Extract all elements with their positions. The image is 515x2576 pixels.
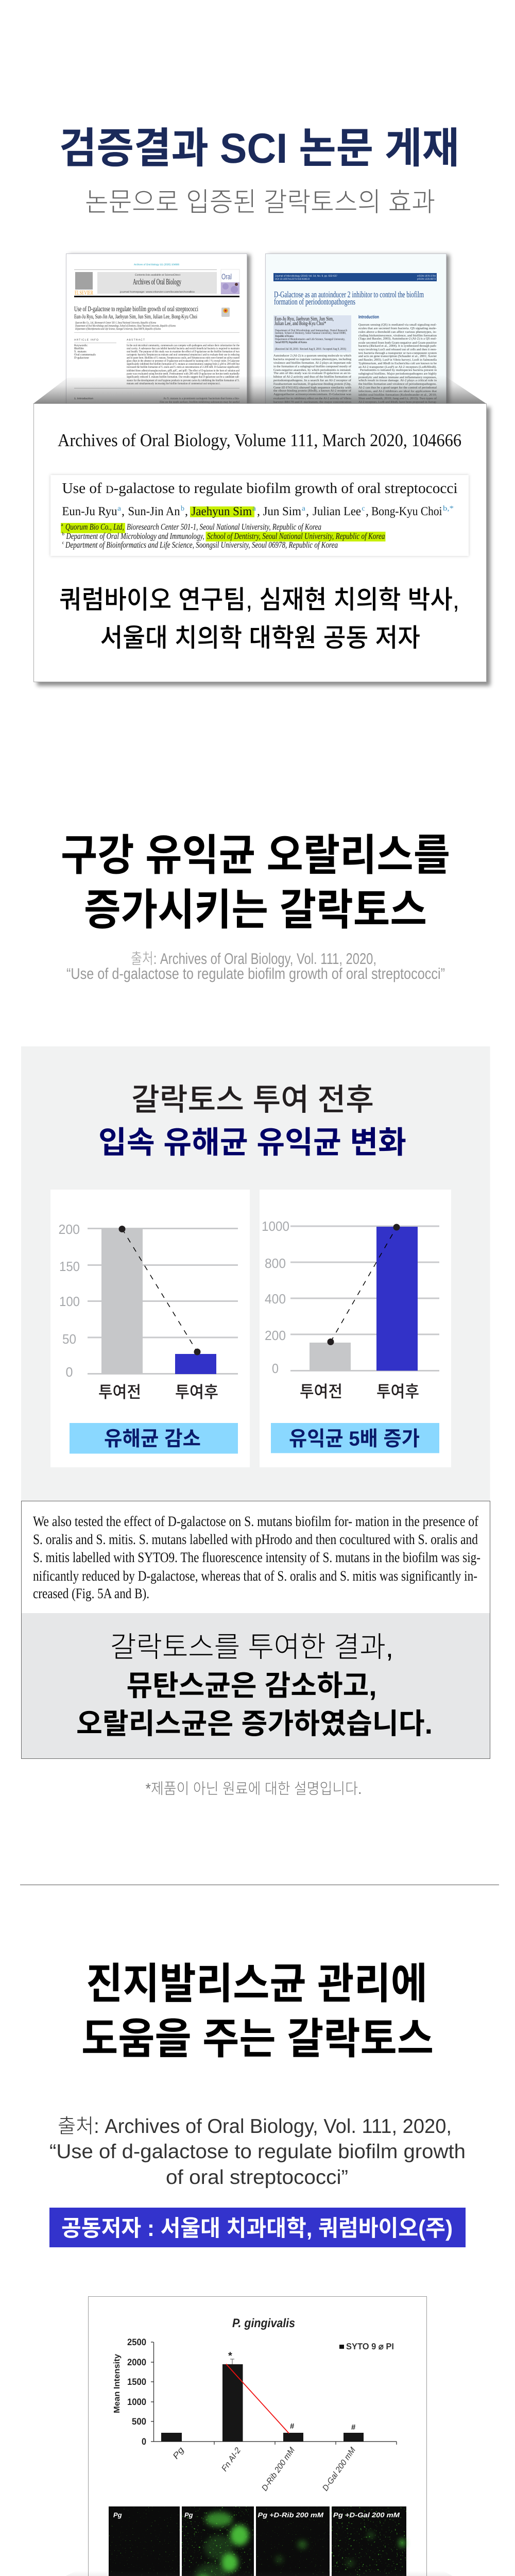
source text: section 3: 출처: Archives of Oral Biology, Vol. 111, 2020, xyxy=(58,2115,452,2138)
figure: P. gingivalis study xyxy=(89,2297,426,2576)
article body right column: inhibit oral biofilm formation (Kolenbrander et al., 2010; xyxy=(358,393,437,397)
affiliations xyxy=(75,321,176,331)
affiliation lines: Department of Oral Microbiology and Immunology, xyxy=(66,531,204,541)
trend line xyxy=(118,1226,201,1355)
bars xyxy=(161,2359,364,2442)
x axis labels: 투여후 xyxy=(175,1383,218,1401)
journal header bar: Journal of Microbiology (2016) Vol. 54, No. 9, pp. 632-637 xyxy=(275,275,337,278)
footnote: section 2: *제품이 아닌 원료에 대한 설명입니다. xyxy=(145,1781,362,1798)
significance marks xyxy=(228,2350,356,2432)
bar chart: beneficial bacteria xyxy=(260,1190,451,1467)
conclusion text xyxy=(76,1631,433,1740)
trend line xyxy=(328,1224,400,1345)
x axis labels: 투여후 xyxy=(376,1382,419,1401)
author list: a xyxy=(302,505,306,513)
introduction: 1. Introduction xyxy=(74,397,93,400)
callout: decrease xyxy=(70,1423,238,1454)
journal citation line: Archives of Oral Biology 111 (2020) 104666 xyxy=(134,263,179,266)
author sidebar: Institute, School of Dentistry, Seoul National University, Seoul 03080, xyxy=(275,331,346,335)
significance marks: # xyxy=(290,2422,295,2431)
article body left column: hibitor of AI-2 activity and thus of the biofilm formation of xyxy=(273,375,351,379)
author list: Jaehyun Sim xyxy=(192,505,252,518)
article info and abstract: paste was evaluated using bovine teeth. Pretreatment with 200 mM D-galactose on bovine teeth markedly xyxy=(127,372,239,376)
excerpt text: creased (Fig. 5A and B). xyxy=(33,1586,149,1602)
y axis: 500 xyxy=(132,2416,146,2427)
author sidebar: Seoul 06978, Republic of Korea xyxy=(275,341,307,344)
callout: increase xyxy=(271,1423,439,1453)
article body left column: virulence and biofilm formation. AI-2 plays an important role xyxy=(273,361,351,365)
y axis: 1500 xyxy=(127,2377,146,2387)
author list: a xyxy=(117,505,122,513)
article info and abstract: ARTICLE INFO xyxy=(74,338,98,342)
author list: b,* xyxy=(443,505,454,513)
bar chart: harmful bacteria xyxy=(50,1190,250,1467)
journal header bar xyxy=(273,273,437,281)
journal cover thumbnail: Oral xyxy=(221,273,232,281)
image labels xyxy=(113,2511,400,2519)
affiliations: Department of Bioinformatics and Life Science, Soongsil University, Seoul 06978, Republic of Korea xyxy=(75,327,161,331)
source text: section 3 xyxy=(49,2115,466,2189)
chart title: P. gingivalis xyxy=(232,2316,295,2330)
author sidebar: Julian Lee, and Bong-Kyu Choi* xyxy=(274,320,326,327)
article body left column: Gram-negative anaerobes, by which periodontitis is initiated. xyxy=(273,368,352,372)
article body right column: the biofilm formation and virulence of periodontopathogens. xyxy=(358,382,437,386)
folder flap over the papers xyxy=(33,375,487,404)
article info and abstract: and in paste form. Biofilms of S. mutans, Streptococcus oralis, and Streptococcus mitis were formed on saliva-coated xyxy=(127,356,239,360)
article info and abstract: mutans and simultaneously increasing the biofilm formation of commensal oral streptococci. xyxy=(127,382,220,385)
article body left column: The aim of this study was to evaluate D-galactose as an in- xyxy=(273,371,351,375)
x axis labels: D-Rib 200 mM xyxy=(260,2446,297,2493)
conclusion text: 갈락토스를 투여한 결과, xyxy=(110,1631,393,1663)
y axis labels: 200 xyxy=(59,1222,80,1237)
article body right column: and Bassler, 2003). LuxP in Vibrio harveyi, LuxR in Salmonella xyxy=(358,358,437,362)
article body right column: infections, and AI-2 inhibitors are ideal for applications that xyxy=(358,389,437,393)
y axis labels: 0 xyxy=(272,1361,279,1376)
affiliations: Department of Oral Microbiology and Immunology, School of Dentistry, Seoul National University, Republic of Korea xyxy=(75,324,176,328)
bars xyxy=(101,1228,216,1374)
green biofilm clusters xyxy=(195,2512,405,2576)
affiliation lines: c xyxy=(62,540,64,545)
y axis xyxy=(113,2337,397,2447)
journal masthead: journal homepage: www.elsevier.com/locate/archoralbio xyxy=(119,291,195,294)
folder flap over the figure xyxy=(23,2571,491,2576)
article body right column: (Taga and Bassler, 2003). Autoinducer-2 (AI-2) is a QS mol- xyxy=(358,337,437,341)
x axis labels: D-Gal 200 mM xyxy=(321,2446,357,2493)
y axis labels: 50 xyxy=(62,1331,76,1347)
article body right column: an AI-2 transporter (LuxP) or AI-2 receptors (LsrB/RbsB). xyxy=(358,365,437,369)
article body right column: ecules that are secreted from bacteria. QS signaling mole- xyxy=(358,327,437,330)
affiliation lines: School of Dentistry, Seoul National University, Republic of Korea xyxy=(207,531,385,541)
author list: , xyxy=(185,505,188,518)
x axis labels: Fn AI-2 xyxy=(220,2446,243,2473)
y axis: 0 xyxy=(142,2436,146,2447)
article info and abstract: inhibited three adhesin/transglucosylases, gtfB, gtfC, and gtfD. The effect of D-galactose in the form of solution and xyxy=(127,369,239,372)
heading: section 2: 구강 유익균 오랄리스를 xyxy=(61,831,450,879)
article body right column: which result in tissue damage. AI-2 plays a critical role in xyxy=(358,379,437,382)
journal header bar: pISSN 1225-8873 xyxy=(417,278,436,281)
source text: section 2: “Use of d-galactose to regulate biofilm growth of oral streptococci” xyxy=(66,965,445,982)
author list xyxy=(62,505,454,518)
author list: , xyxy=(306,505,309,518)
y axis labels: 800 xyxy=(265,1256,286,1271)
bars xyxy=(310,1227,418,1370)
panel: chart background xyxy=(21,1046,490,1501)
article body right column xyxy=(358,314,437,404)
article body right column: and acts on gene transcription (Schauder et al., 2001; Xavier xyxy=(358,354,437,358)
article body right column: Typhimurium, and RbsB in Escherichia coli are known to be xyxy=(358,362,437,365)
y axis: 1000 xyxy=(127,2397,146,2407)
journal masthead xyxy=(97,272,217,294)
panel: left journal paper xyxy=(66,253,247,404)
article title: D-Galactose as an autoinducer 2 inhibitor to control the biofilm xyxy=(274,290,424,299)
article body left column: the ribose-binding protein (RbsB), a known AI-2 receptor of xyxy=(273,389,351,393)
author list: Julian Lee xyxy=(313,505,361,518)
author list: , xyxy=(366,505,369,518)
panel: study excerpt and conclusion xyxy=(22,1501,490,1759)
heading: section 3: 도움을 주는 갈락토스 xyxy=(81,2015,434,2063)
author list: c xyxy=(362,505,365,513)
y axis labels xyxy=(262,1218,289,1376)
author list: Jun Sim xyxy=(263,505,301,518)
significance marks: * xyxy=(228,2350,232,2362)
heading: section 2 xyxy=(61,831,450,934)
image labels: Pg xyxy=(113,2511,122,2519)
article body left column: Gene ID FN1165) showed high sequence similarity with xyxy=(273,386,351,389)
affiliation lines: Department of Bioinformatics and Life Science, Soongsil University, Seoul 06978, Republic of Korea xyxy=(65,540,338,550)
conclusion text: 뮤탄스균은 감소하고, xyxy=(127,1669,377,1702)
article body left column: evaluated for its inhibitory effect on the AI-2 activity of Vibrio xyxy=(273,397,351,400)
y axis labels: 150 xyxy=(59,1259,80,1274)
journal reference: Archives of Oral Biology, Volume 111, March 2020, 104666 xyxy=(58,430,461,450)
article body right column: cluding bioluminescence, virulence, and biofilm formation xyxy=(358,334,437,337)
author list: Eun-Ju Ryu xyxy=(62,505,117,518)
summary text: 서울대 치의학 대학원 공동 저자 xyxy=(100,623,420,652)
card: paper title and authors xyxy=(50,475,469,556)
y axis labels: 100 xyxy=(59,1294,80,1309)
chart heading: 입속 유해균 유익균 변화 xyxy=(98,1125,406,1160)
journal cover thumbnail xyxy=(221,269,239,294)
article info and abstract: oral health. The purpose of this study was to examine the effect of D-galactose on the biofilm formation of two xyxy=(127,350,239,353)
article body right column: bacteria (Bickard et al., 2004). It is synthesized through path- xyxy=(358,344,437,348)
author list: , xyxy=(257,505,260,518)
icon: crossmark xyxy=(221,308,230,317)
article info and abstract: significantly reduced S. mutans biofilm formation. Our results suggest that D-galactose can be a candidate sub- xyxy=(127,375,239,379)
chart heading: 갈락토스 투여 전후 xyxy=(131,1082,374,1117)
article body right column: ecule secreted from both Gram-negative and Gram-positive xyxy=(358,341,437,345)
article info and abstract: increased the biofilm formation of S. oralis and S. mitis at concentrations of 2-200 mM. D-Galactose significantly xyxy=(127,365,239,369)
x axis labels xyxy=(98,1383,218,1401)
legend: SYTO 9 ⌀ PI xyxy=(346,2342,394,2351)
y axis: 2000 xyxy=(127,2357,146,2367)
image labels: Pg +D-Gal 200 mM xyxy=(333,2511,400,2519)
article info and abstract: glass chips in the absence or presence of D-galactose and evaluated by staining with 1 % crystal violet. D-Galactose xyxy=(127,359,239,363)
journal masthead: Archives of Oral Biology xyxy=(133,278,181,286)
y axis labels: 0 xyxy=(66,1364,73,1380)
subtitle: 논문으로 입증된 갈락토스의 효과 xyxy=(85,188,435,217)
article info and abstract: cariogenic bacteria Streptococcus mutans and oral commensal streptococci and to evaluate their use in reducing xyxy=(127,353,239,357)
article body left column: Aggregatibacter actinomycetemcomitans. D-Galactose was xyxy=(273,393,352,396)
article body right column: ters bacteria through a transporter or two-component system xyxy=(358,351,437,355)
image labels: Pg +D-Rib 200 mM xyxy=(258,2511,324,2519)
article body left column xyxy=(273,354,352,404)
article info and abstract: Biofilm xyxy=(74,347,84,350)
summary text: 쿼럼바이오 연구팀, 심재현 치의학 박사, xyxy=(59,585,459,614)
article info and abstract: Oral commensals xyxy=(74,353,96,357)
journal header bar: DOI 10.1007/s12275-016-6345-8 xyxy=(275,278,310,281)
author sidebar: Eun-Ju Ryu, Jaehyun Sim, Jun Sim, xyxy=(274,316,334,322)
y axis labels: 400 xyxy=(265,1291,286,1307)
article body right column: proteolytic and induce immune and inflammatory responses, xyxy=(358,376,437,379)
x axis labels: 투여전 xyxy=(98,1383,141,1401)
author list: a xyxy=(252,505,256,513)
article body right column: Shao and Demuth, 2010; Jang and Li, 2013). Two types of xyxy=(358,397,437,400)
callout: decrease: 유해균 감소 xyxy=(104,1428,201,1450)
article body right column: AI-2 can thus be a good target for the control of periodontal xyxy=(358,386,437,389)
affiliation lines xyxy=(61,522,385,550)
article info and abstract: Keywords: xyxy=(74,344,88,347)
article body right column: ways involving LuxS and released out of cells and then it reen- xyxy=(358,348,437,351)
article info and abstract: ABSTRACT xyxy=(127,338,145,342)
article info and abstract: S. mutans xyxy=(74,350,87,353)
source text: section 3: of oral streptococci” xyxy=(166,2166,348,2189)
article body right column: Periodontitis is initiated by multispecies bacteria present in xyxy=(360,368,437,372)
paper title: Use of D-galactose to regulate biofilm growth of oral streptococci xyxy=(62,480,457,497)
article title: formation of periodontopathogens xyxy=(274,297,355,307)
introduction xyxy=(74,397,239,404)
y axis labels: 1000 xyxy=(262,1218,289,1234)
author sidebar: Republic of Korea xyxy=(275,334,294,338)
y axis: 2500 xyxy=(127,2337,146,2347)
author sidebar xyxy=(273,315,351,352)
article body left column: bacteria respond to regulate various phenotypes, including xyxy=(273,358,351,361)
article info and abstract: In the oral microbial community, commensals can compete with pathogens and reduce their colonization for the xyxy=(127,344,239,347)
article info and abstract: stance for the development of oral hygiene products to prevent caries by inhibiting the biofilm formation of S. xyxy=(127,379,239,382)
author list: Bong-Kyu Choi xyxy=(371,505,442,518)
x axis labels xyxy=(300,1382,419,1401)
journal masthead: Contents lists available at ScienceDirect xyxy=(135,274,181,277)
author list: , xyxy=(122,505,125,518)
conclusion text: 오랄리스균은 증가하였습니다. xyxy=(76,1707,433,1740)
microscope images xyxy=(109,2506,406,2576)
banner: co-authors xyxy=(49,2208,466,2247)
article body right column: Quorum sensing (QS) is mediated via small signaling mol- xyxy=(358,323,437,327)
article info and abstract: significantly inhibited the biofilm formation of S. mutans at concentrations ranging from 2 µM to 200 mM but xyxy=(127,362,239,366)
article body left column: in the formation of a subgingival biofilm composed mostly of xyxy=(273,365,351,368)
heading: section 3: 진지발리스균 관리에 xyxy=(86,1960,427,2008)
article title: Use of D-galactose to regulate biofilm growth of oral streptococci xyxy=(74,306,198,313)
article body left column: Autoinducer 2 (AI-2) is a quorum sensing molecule to which xyxy=(273,354,351,358)
x axis labels: Pg xyxy=(171,2446,186,2461)
author sidebar: Department of Oral Microbiology and Immunology, Dental Research xyxy=(275,329,347,332)
affiliation lines: a xyxy=(61,522,63,527)
panel: right journal paper xyxy=(266,253,446,404)
y axis labels: 200 xyxy=(265,1328,286,1343)
article body right column: subgingival biofilms. Major periodontopathogens are highly xyxy=(358,372,437,376)
icon: Elsevier tree: ELSEVIER xyxy=(75,289,93,296)
journal header bar: eISSN 1976-3794 xyxy=(417,275,436,278)
article info and abstract: oral cavity. A substance that can inhibit harmful bacteria and enrich beneficial bacteria is required to maintain xyxy=(127,347,239,350)
title: 검증결과 SCI 논문 게재: 검증결과 SCI 논문 게재 xyxy=(59,125,459,172)
article title xyxy=(274,290,424,307)
article body left column: Fusobacterium nucleatum, D-galactose-binding protein (Gbp, xyxy=(273,382,352,386)
panel: citation box xyxy=(34,404,486,682)
x axis labels: 투여전 xyxy=(300,1382,342,1401)
image labels: Pg xyxy=(184,2511,193,2519)
affiliation lines: Quorum Bio Co., Ltd, xyxy=(65,522,124,532)
article info and abstract xyxy=(74,338,239,385)
source text: section 2: 출처: Archives of Oral Biology, Vol. 111, 2020, xyxy=(131,951,376,968)
affiliation lines: b xyxy=(62,531,65,536)
article body left column: harveyi BB170 and F. nucleatum, the major concentration xyxy=(273,400,351,404)
affiliations: Quorum Bio Co., Ltd., Bioresearch Center 501-1, Seoul National University, Republic of Korea xyxy=(75,321,156,325)
heading: section 2: 증가시키는 갈락토스 xyxy=(84,886,427,934)
source text: section 2 xyxy=(66,951,445,982)
highlights xyxy=(61,506,385,541)
x axis labels xyxy=(171,2446,357,2493)
callout: increase: 유익균 5배 증가 xyxy=(289,1428,420,1450)
article body left column: periodontopathogens. In a search for an AI-2 receptor of xyxy=(273,379,351,382)
authors: Eun-Ju Ryu, Sun-Jin An, Jaehyun Sim, Jun Sim, Julian Lee, Bong-Kyu Choi xyxy=(74,314,197,320)
author sidebar: Department of Bioinformatics and Life Science, Soongsil University, xyxy=(275,337,345,341)
article body right column: AI-2 receptors, LsrB and RbsB, have been proposed in Aerug- xyxy=(358,400,437,404)
chart heading xyxy=(98,1082,406,1160)
summary text xyxy=(59,585,459,652)
icon: Elsevier tree xyxy=(75,272,93,296)
heading: section 3 xyxy=(81,1960,434,2063)
article info and abstract: D-galactose xyxy=(74,356,89,360)
author list: b xyxy=(181,505,184,513)
article body right column: Introduction xyxy=(358,314,379,319)
introduction: film on the tooth surface, biofilm-inhibiting substances may be useful xyxy=(160,400,239,404)
banner: co-authors: 공동저자 : 서울대 치과대학, 쿼럼바이오(주) xyxy=(61,2216,453,2241)
affiliation lines: Bioresearch Center 501-1, Seoul National University, Republic of Korea xyxy=(127,522,321,532)
source text: section 3: “Use of d-galactose to regulate biofilm growth xyxy=(49,2141,466,2163)
red trend line xyxy=(226,2364,289,2433)
introduction: As S. mutans is a prominent cariogenic bacterium that forms a bio- xyxy=(163,397,239,400)
significance marks: # xyxy=(351,2423,356,2432)
article body right column: cules above a threshold can affect various phenotypes, in- xyxy=(358,330,437,334)
author sidebar: (Received Jul 18, 2016 / Revised Aug 9, 2016 / Accepted Aug 9, 2016) xyxy=(275,347,346,351)
excerpt text xyxy=(33,1514,480,1602)
y axis labels xyxy=(59,1222,80,1380)
author list: Sun-Jin An xyxy=(128,505,180,518)
y axis: Mean Intensity xyxy=(113,2354,122,2413)
